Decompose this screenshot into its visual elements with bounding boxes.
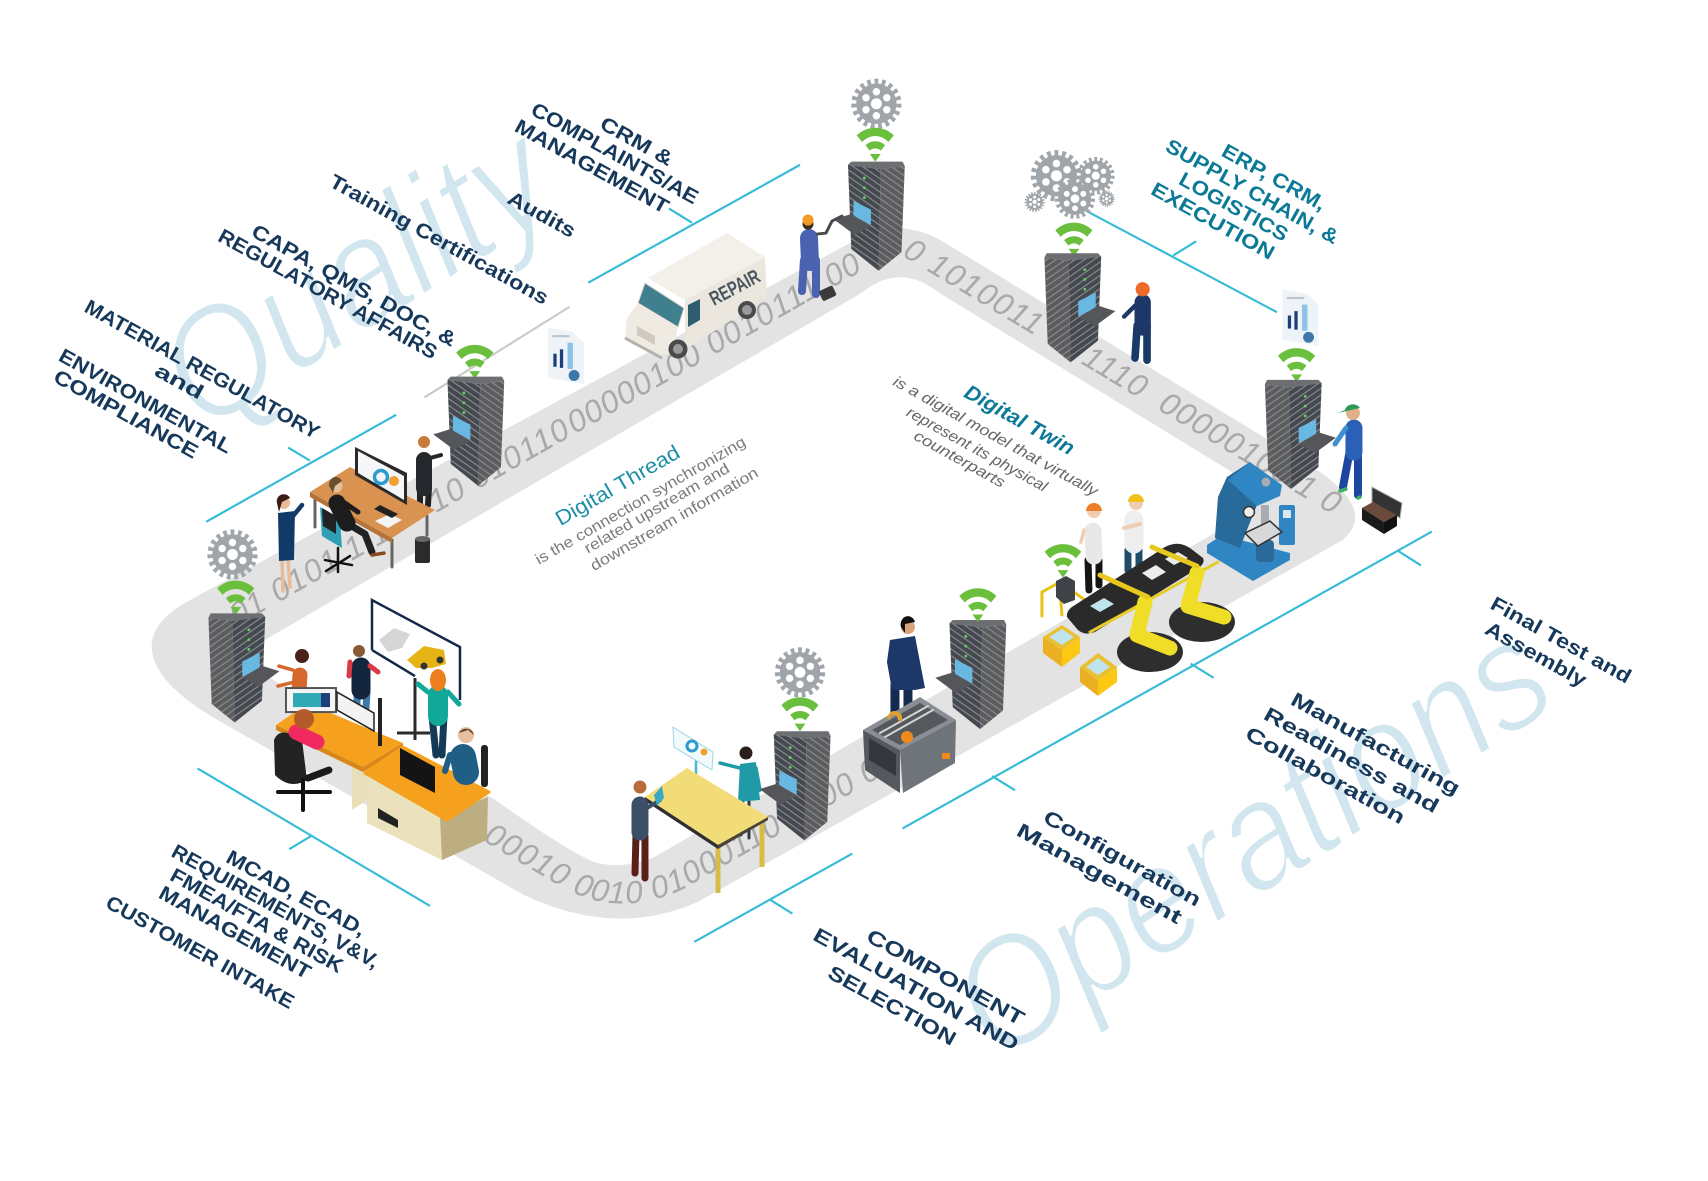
label: Component: COMPONENT [862,925,1029,1031]
icon: gear left [211,533,254,576]
design team scene [274,600,489,860]
digital thread band [152,228,1355,919]
monitor with charts [355,447,407,505]
person at board [349,645,378,708]
label: Manufacturing [1241,689,1464,829]
desk two [365,747,489,860]
binary text on band: 00000100 1 0 [1160,394,1342,512]
icon: wifi left [456,345,493,379]
watermark: Operations: Operations [921,585,1580,1092]
icon: gear cluster [1026,154,1114,216]
label: CRM complaints: MANAGEMENT [511,116,673,219]
man with tablet [633,781,664,878]
seated person and chair [320,477,384,572]
van [625,233,767,359]
label: ERP: ERP, CRM, [1218,140,1330,216]
server printer [935,620,1006,729]
label: material regulatory: ENVIRONMENTAL [55,345,235,458]
black monitor [400,748,435,793]
icon: wifi right [1278,348,1315,382]
label: ERP [1147,135,1342,265]
icon: gear lower [778,651,822,694]
icon: wifi top [857,128,894,162]
binary text on band: 10 010110 [432,419,568,512]
label: MCAD [102,841,382,1014]
desk [310,467,435,567]
desk one [276,712,403,810]
label: Component [809,924,1029,1056]
binary text on band: 01 0101 1 1 [232,527,388,620]
label: ERP: EXECUTION [1147,179,1278,265]
label: CRM complaints: CRM & [596,113,676,171]
label: Manufacturing: Readiness and [1260,704,1442,818]
binary text on band [232,241,1342,904]
icon: document left [548,327,584,384]
woman teal top [418,669,459,755]
text: Digital Thread: downstream information [588,464,761,575]
label: ERP: SUPPLY CHAIN, & [1162,135,1342,249]
label: Manufacturing: Collaboration [1241,723,1409,829]
speaker [378,698,382,746]
robot production line [1042,494,1235,696]
label: Configuration [1013,806,1205,929]
label: CAPA: REGULATORY AFFAIRS [214,225,441,364]
label: Final test: Final Test and [1487,593,1635,688]
robot arm one [1100,575,1183,672]
standing woman [277,494,302,591]
bracket: operations [903,532,1432,828]
label: MCAD: MCAD, ECAD, [222,846,369,941]
server right [1265,380,1336,489]
table scene [633,727,768,893]
hologram panel [673,727,713,782]
label: MCAD: FMEA/FTA & RISK [166,864,347,978]
conveyor [1067,544,1218,634]
man in suit [887,616,925,712]
yellow table [645,768,768,893]
label: ERP: LOGISTICS [1175,168,1292,246]
seated woman and chair [274,709,330,810]
label: material regulatory: and [151,360,207,404]
text: Digital Twin: counterparts [911,427,1008,492]
bracket: ERP [1086,211,1277,312]
bracket: MCAD [198,768,430,906]
server top [834,162,905,271]
label: Training Certifications: Training Certifications [326,171,552,310]
whiteboard [372,600,460,740]
bracket: material [206,415,396,522]
binary text on band: 0 1110 [1070,350,1148,395]
label: Audits: Audits [504,187,579,243]
icon: wifi ERP [1055,223,1092,257]
worker with green hat [1335,404,1360,498]
text: Digital Thread: Digital Thread [551,441,684,531]
label: CAPA: CAPA, QMS, DOC, & [248,221,460,351]
icon: document right [1282,289,1318,346]
woman orange shirt [278,649,309,690]
label: Configuration: Configuration [1039,806,1205,911]
label: material regulatory [50,296,324,464]
server left [433,377,504,486]
label: MCAD: REQUIREMENTS, V&V, [168,841,382,973]
yellow boxes [1043,625,1117,696]
label: Final test: Assembly [1481,618,1591,692]
label: CRM complaints: COMPLAINTS/AE [527,99,702,209]
workers [1081,494,1144,590]
left table and box [1042,576,1085,616]
worker with orange hat [1124,282,1150,360]
server ERP [1044,253,1115,362]
woman in teal [720,747,760,838]
label: Component: SELECTION [824,962,960,1051]
icon: wifi robots [1045,544,1081,578]
watermark: Quality: Quality [128,85,587,461]
blue milling machine [1207,462,1295,581]
label: MCAD: MANAGEMENT [155,882,315,984]
robot arm two [1152,547,1235,642]
text: Digital Twin: is a digital model that virtually [890,373,1102,501]
3D printer [863,697,956,793]
label: CRM complaints [511,99,702,219]
label: Manufacturing: Manufacturing [1287,689,1464,800]
text: Digital Thread: is the connection synchronizing [532,434,749,568]
label: material regulatory: COMPLIANCE [50,366,201,464]
binary text on band: 0 1010011 [904,241,1042,334]
text: Digital Thread: related upstream and [581,460,733,557]
server lower [760,731,831,840]
bracket: CRM [588,165,800,283]
icon: gear top [855,82,898,126]
white monitor [286,688,336,712]
label: Component: EVALUATION AND [809,924,1022,1056]
icon: wifi lower [781,697,819,731]
label: MCAD: CUSTOMER INTAKE [102,892,298,1014]
bracket: component [694,854,852,942]
second monitor [337,692,374,731]
standing man [418,436,441,505]
text: Digital Twin: Digital Twin [960,381,1078,460]
office desk scene [277,436,441,591]
van: REPAIR [706,265,764,310]
text: Digital Twin: represent its physical [903,404,1051,496]
divider: training [425,307,570,397]
icon: wifi far left [217,581,254,615]
label: Configuration: Management [1013,820,1186,929]
server far left [208,613,279,723]
seated man [445,727,488,787]
bin [415,536,430,563]
label: material regulatory: MATERIAL REGULATORY [81,296,324,444]
toolbox [1362,487,1402,534]
icon: wifi printer [959,588,996,622]
repair worker [802,215,842,301]
